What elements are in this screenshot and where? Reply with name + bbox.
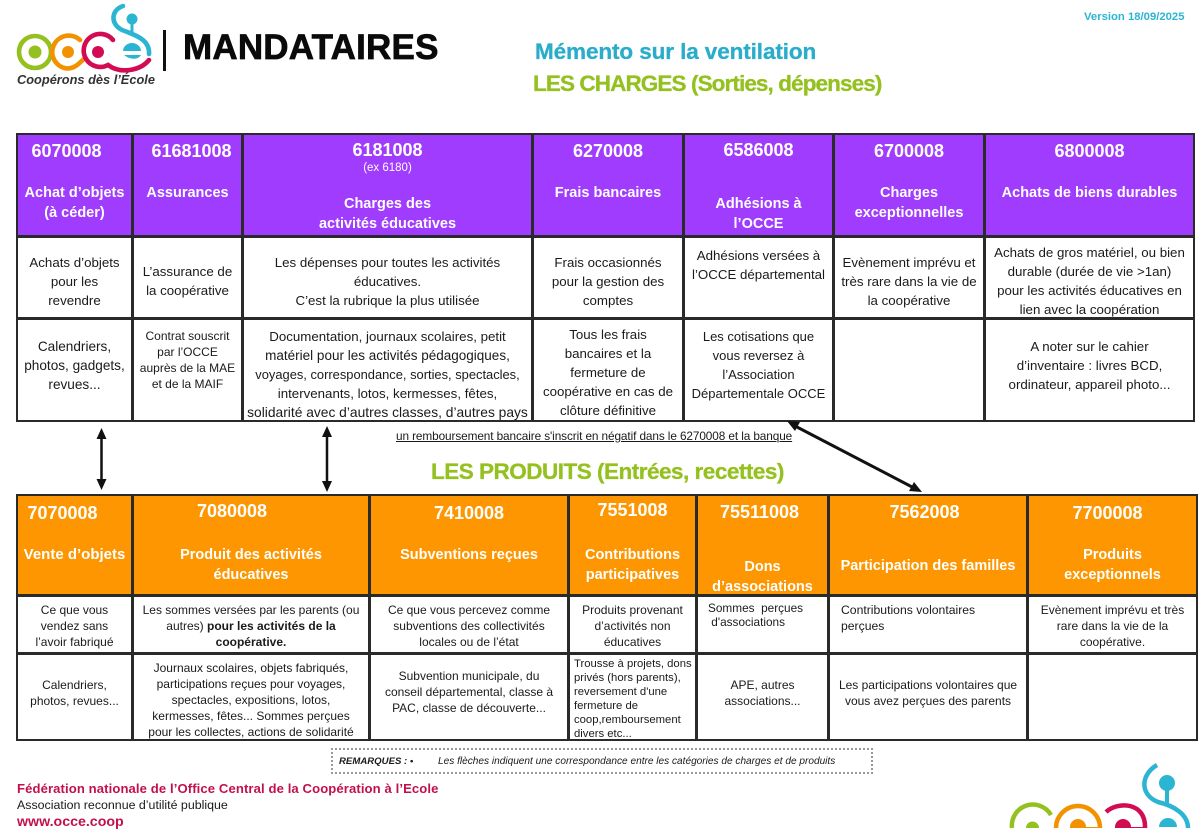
charge header 6700008	[833, 133, 985, 237]
charge header 6800008	[984, 133, 1195, 237]
definition 7562008	[828, 595, 1028, 654]
examples 6800008: A noter sur le cahier	[1030, 339, 1149, 354]
logo: OCCE	[16, 4, 155, 87]
definition 6070008	[16, 236, 133, 319]
definition 75511008: Sommes perçues	[708, 601, 803, 615]
charge header 6070008: 6070008	[31, 141, 102, 161]
charge header 6270008: Frais bancaires	[555, 185, 661, 201]
charge header 61681008	[132, 133, 243, 237]
definition 6181008: C’est la rubrique la plus utilisée	[295, 293, 480, 308]
heading: les produits: LES PRODUITS (Entrées, recettes)	[431, 459, 784, 484]
examples 6181008: intervenants, lotos, kermesses, fêtes,	[278, 386, 497, 401]
examples 7551008: reversement d'une	[574, 686, 667, 698]
arrow: activités éducatives	[322, 426, 332, 492]
arrows: correspondences	[96, 421, 922, 492]
examples 6586008: Les cotisations que	[703, 329, 814, 344]
title: Mandataires: MANDATAIRES	[183, 28, 439, 67]
definition 75511008	[696, 595, 829, 654]
examples 7551008: divers etc...	[574, 728, 632, 740]
heading: mémento: Mémento sur la ventilation	[535, 39, 816, 64]
charge header 6700008: Charges	[880, 185, 938, 201]
definition 6800008: durable (durée de vie >1an)	[1008, 264, 1171, 279]
product header 7080008: 7080008	[197, 501, 267, 521]
definition 6800008: lien avec la coopération	[1020, 302, 1159, 317]
footer: federation text	[17, 781, 439, 830]
charge header 61681008: Assurances	[146, 185, 229, 201]
charge header 6800008: 6800008	[1054, 141, 1125, 161]
definition 6181008: éducatives.	[354, 274, 421, 289]
examples 7080008: pour les collectes, actions de solidarité	[148, 725, 354, 739]
definition 7080008: autres) pour les activités de la	[166, 619, 336, 633]
examples 7410008: PAC, classe de découverte...	[392, 701, 546, 715]
charge header 6070008: (à céder)	[44, 205, 105, 221]
examples 75511008	[696, 653, 829, 741]
examples 6181008	[242, 318, 533, 422]
note: remboursement bancaire: un remboursement bancaire s'inscrit en négatif dans le 6270008 et la banque	[396, 429, 792, 443]
product header 7070008	[16, 494, 133, 596]
definition 7410008	[369, 595, 569, 654]
definition 7070008: vendez sans	[41, 619, 108, 633]
charge header 6586008: Adhésions à	[715, 196, 802, 212]
examples 7410008: Subvention municipale, du	[399, 669, 539, 683]
product examples row	[16, 654, 1198, 741]
examples 7080008: Journaux scolaires, objets fabriqués,	[154, 661, 348, 675]
definition 7080008	[132, 595, 370, 654]
examples 6070008	[16, 318, 133, 422]
definition 7562008: Contributions volontaires	[841, 603, 975, 617]
definition 7410008: Ce que vous percevez comme	[388, 603, 550, 617]
examples 7551008: privés (hors parents),	[574, 672, 681, 684]
product header 7080008: Produit des activités	[180, 547, 322, 563]
charge header 6586008	[683, 133, 834, 237]
examples 7551008: coop,remboursement	[574, 714, 681, 726]
product header 7700008: exceptionnels	[1064, 567, 1161, 583]
definition 7700008: rare dans la vie de la	[1057, 619, 1168, 633]
definition 6070008: Achats d’objets	[29, 255, 120, 270]
charge header 6586008: 6586008	[723, 140, 794, 160]
product header 7551008: participatives	[586, 567, 679, 583]
definition 6586008: Adhésions versées à	[697, 248, 820, 263]
charge header 6181008: activités éducatives	[319, 216, 456, 232]
product header 7551008: Contributions	[585, 547, 680, 563]
examples 6270008: coopérative en cas de	[543, 384, 673, 399]
logo separator	[163, 30, 166, 71]
definition 7551008: éducatives	[604, 635, 661, 649]
definition 7080008: coopérative.	[216, 635, 286, 649]
examples 75511008: associations...	[724, 694, 801, 708]
examples 6586008: Départementale OCCE	[692, 386, 825, 401]
examples 7080008: kermesses, fêtes... Sommes perçues	[152, 709, 350, 723]
examples 6586008	[683, 318, 834, 422]
definition 7551008: d’activités non	[594, 619, 671, 633]
examples 75511008: APE, autres	[730, 678, 795, 692]
product header 75511008: 75511008	[720, 502, 799, 522]
examples 7080008	[132, 653, 370, 741]
definition 6181008	[242, 236, 533, 319]
charge header 6700008: 6700008	[874, 141, 944, 161]
definition 6270008	[532, 236, 684, 319]
examples 6270008: clôture définitive	[560, 403, 656, 418]
product header 7410008: Subventions reçues	[400, 547, 538, 563]
product header 7070008: Vente d’objets	[24, 546, 125, 563]
charge definitions row	[16, 237, 1195, 318]
footer: federation text: Fédération nationale de l’Office Central de la Coopération à l’Ecole	[17, 781, 439, 796]
product header 7551008: 7551008	[597, 500, 668, 520]
examples 6270008: fermeture de	[570, 365, 646, 380]
callout: remarques: Les flèches indiquent une correspondance entre les catégories de charges et de produits	[438, 756, 835, 767]
examples 6586008: l’Association	[722, 367, 795, 382]
examples 7700008 empty	[1027, 653, 1198, 741]
examples 61681008: et de la MAIF	[152, 377, 223, 391]
charge header 6070008	[16, 133, 133, 237]
examples 7070008	[16, 653, 133, 741]
definition 7700008: Evènement imprévu et très	[1041, 603, 1184, 617]
examples 6181008: matériel pour les activités pédagogiques,	[265, 348, 510, 363]
product header 7551008	[568, 494, 697, 596]
definition 7700008: coopérative.	[1080, 635, 1145, 649]
definition 6700008: Evènement imprévu et	[842, 255, 976, 270]
product header 7700008: Produits	[1083, 547, 1142, 563]
product header 7410008: 7410008	[434, 503, 504, 523]
examples 61681008: auprès de la MAE	[140, 361, 235, 375]
definition 7700008	[1027, 595, 1198, 654]
product header 7562008: 7562008	[889, 502, 960, 522]
examples 7080008: participations reçues pour voyages,	[157, 677, 345, 691]
definition 6070008: revendre	[48, 293, 101, 308]
definition 6700008: la coopérative	[868, 293, 950, 308]
examples 7562008	[828, 653, 1028, 741]
examples 6070008: photos, gadgets,	[24, 358, 125, 373]
version: Version 18/09/2025	[1084, 11, 1184, 23]
examples 6070008: Calendriers,	[38, 339, 111, 354]
arrow: objets	[96, 428, 106, 490]
definition 7070008: l’avoir fabriqué	[35, 635, 114, 649]
definition 6270008: comptes	[583, 293, 633, 308]
examples 6700008 empty	[833, 318, 985, 422]
examples 6181008: solidarité avec d’autres classes, d’autres pays	[247, 405, 528, 420]
logo: footer arcs	[1010, 763, 1190, 828]
definition 7070008	[16, 595, 133, 654]
charge header 6586008: l’OCCE	[734, 216, 783, 232]
definition 6070008: pour les	[51, 274, 98, 289]
charge header 6181008: 6181008	[352, 140, 423, 160]
logo: OCCE: Coopérons dès l’École	[17, 72, 155, 87]
definition 6800008	[984, 236, 1195, 319]
heading: les charges: LES CHARGES (Sorties, dépenses)	[533, 71, 881, 96]
charge header 6181008	[242, 133, 533, 237]
product header 7562008: Participation des familles	[841, 558, 1015, 574]
definition 7562008: perçues	[841, 619, 884, 633]
product header 7700008	[1027, 494, 1198, 596]
charge header 6181008: (ex 6180)	[363, 162, 412, 174]
examples 6800008: ordinateur, appareil photo...	[1009, 377, 1170, 392]
charge header 6270008: 6270008	[573, 141, 643, 161]
product header 75511008	[696, 494, 829, 596]
footer: federation text: Association reconnue d’utilité publique	[17, 798, 228, 812]
definition 7551008: Produits provenant	[582, 603, 683, 617]
examples 6800008	[984, 318, 1195, 422]
examples 7410008	[369, 653, 569, 741]
examples 7070008: photos, revues...	[30, 694, 119, 708]
examples 6270008: Tous les frais	[569, 327, 647, 342]
definition 61681008	[132, 236, 243, 319]
examples 7551008: fermeture de	[574, 700, 638, 712]
product header 7700008: 7700008	[1072, 503, 1143, 523]
examples 7410008: conseil départemental, classe à	[385, 685, 553, 699]
definition 75511008: d'associations	[711, 615, 785, 629]
definition 7070008: Ce que vous	[41, 603, 108, 617]
charge header 61681008: 61681008	[151, 141, 232, 161]
examples 6270008	[532, 318, 684, 422]
definition 6586008: l’OCCE départemental	[692, 267, 825, 282]
examples 7562008: vous avez perçues des parents	[845, 694, 1011, 708]
panel: charges table	[16, 133, 1195, 422]
product definitions row	[16, 596, 1198, 653]
definition 6700008: très rare dans la vie de	[841, 274, 977, 289]
charge header 6800008: Achats de biens durables	[1002, 185, 1177, 201]
definition 61681008: L’assurance de	[143, 264, 232, 279]
product header 7410008	[369, 494, 569, 596]
examples 61681008	[132, 318, 243, 422]
charge header 6270008	[532, 133, 684, 237]
callout: remarques	[331, 748, 873, 774]
examples 7551008: Trousse à projets, dons	[574, 658, 692, 670]
definition 61681008: la coopérative	[146, 283, 229, 298]
definition 6586008	[683, 236, 834, 319]
examples 6800008: d’inventaire : livres BCD,	[1017, 358, 1162, 373]
definition 6270008: Frais occasionnés	[554, 255, 662, 270]
callout: remarques: REMARQUES : •	[339, 756, 413, 767]
footer: federation text: www.occe.coop	[17, 814, 124, 830]
examples 7070008: Calendriers,	[42, 678, 107, 692]
examples 7562008: Les participations volontaires que	[839, 678, 1017, 692]
definition 6800008: Achats de gros matériel, ou bien	[994, 245, 1185, 260]
charge header 6700008: exceptionnelles	[855, 205, 963, 221]
examples 61681008: Contrat souscrit	[145, 329, 230, 343]
product header 7070008: 7070008	[27, 503, 98, 523]
definition 6181008: Les dépenses pour toutes les activités	[275, 255, 500, 270]
definition 6700008	[833, 236, 985, 319]
charge header 6181008: Charges des	[344, 196, 431, 212]
definition 6270008: pour la gestion des	[552, 274, 664, 289]
examples 7080008: spectacles, expositions, lotos,	[172, 693, 330, 707]
definition 7080008: Les sommes versées par les parents (ou	[143, 603, 359, 617]
definition 7410008: locales ou de l’état	[419, 635, 519, 649]
definition 7410008: subventions des collectivités	[393, 619, 545, 633]
definition 7551008	[568, 595, 697, 654]
examples 6181008: Documentation, journaux scolaires, petit	[269, 329, 506, 344]
charge examples row	[16, 319, 1195, 422]
product header 75511008: Dons	[744, 559, 781, 575]
product header 7080008	[132, 494, 370, 596]
arrow: adhésions / familles	[787, 421, 922, 492]
charge header 6070008: Achat d’objets	[25, 185, 124, 201]
examples 6586008: vous reversez à	[713, 348, 804, 363]
panel: produits table	[16, 494, 1198, 741]
examples 6270008: bancaires et la	[565, 346, 651, 361]
examples 6070008: revues...	[48, 377, 101, 392]
examples 7551008	[568, 653, 697, 741]
product header 7080008: éducatives	[214, 567, 288, 583]
product header 7562008	[828, 494, 1028, 596]
product header 75511008: d’associations	[712, 579, 813, 595]
definition 6800008: pour les activités éducatives en	[997, 283, 1182, 298]
examples 6181008: voyages, correspondance, sorties, spectacles,	[255, 367, 520, 382]
examples 61681008: par l’OCCE	[157, 345, 218, 359]
